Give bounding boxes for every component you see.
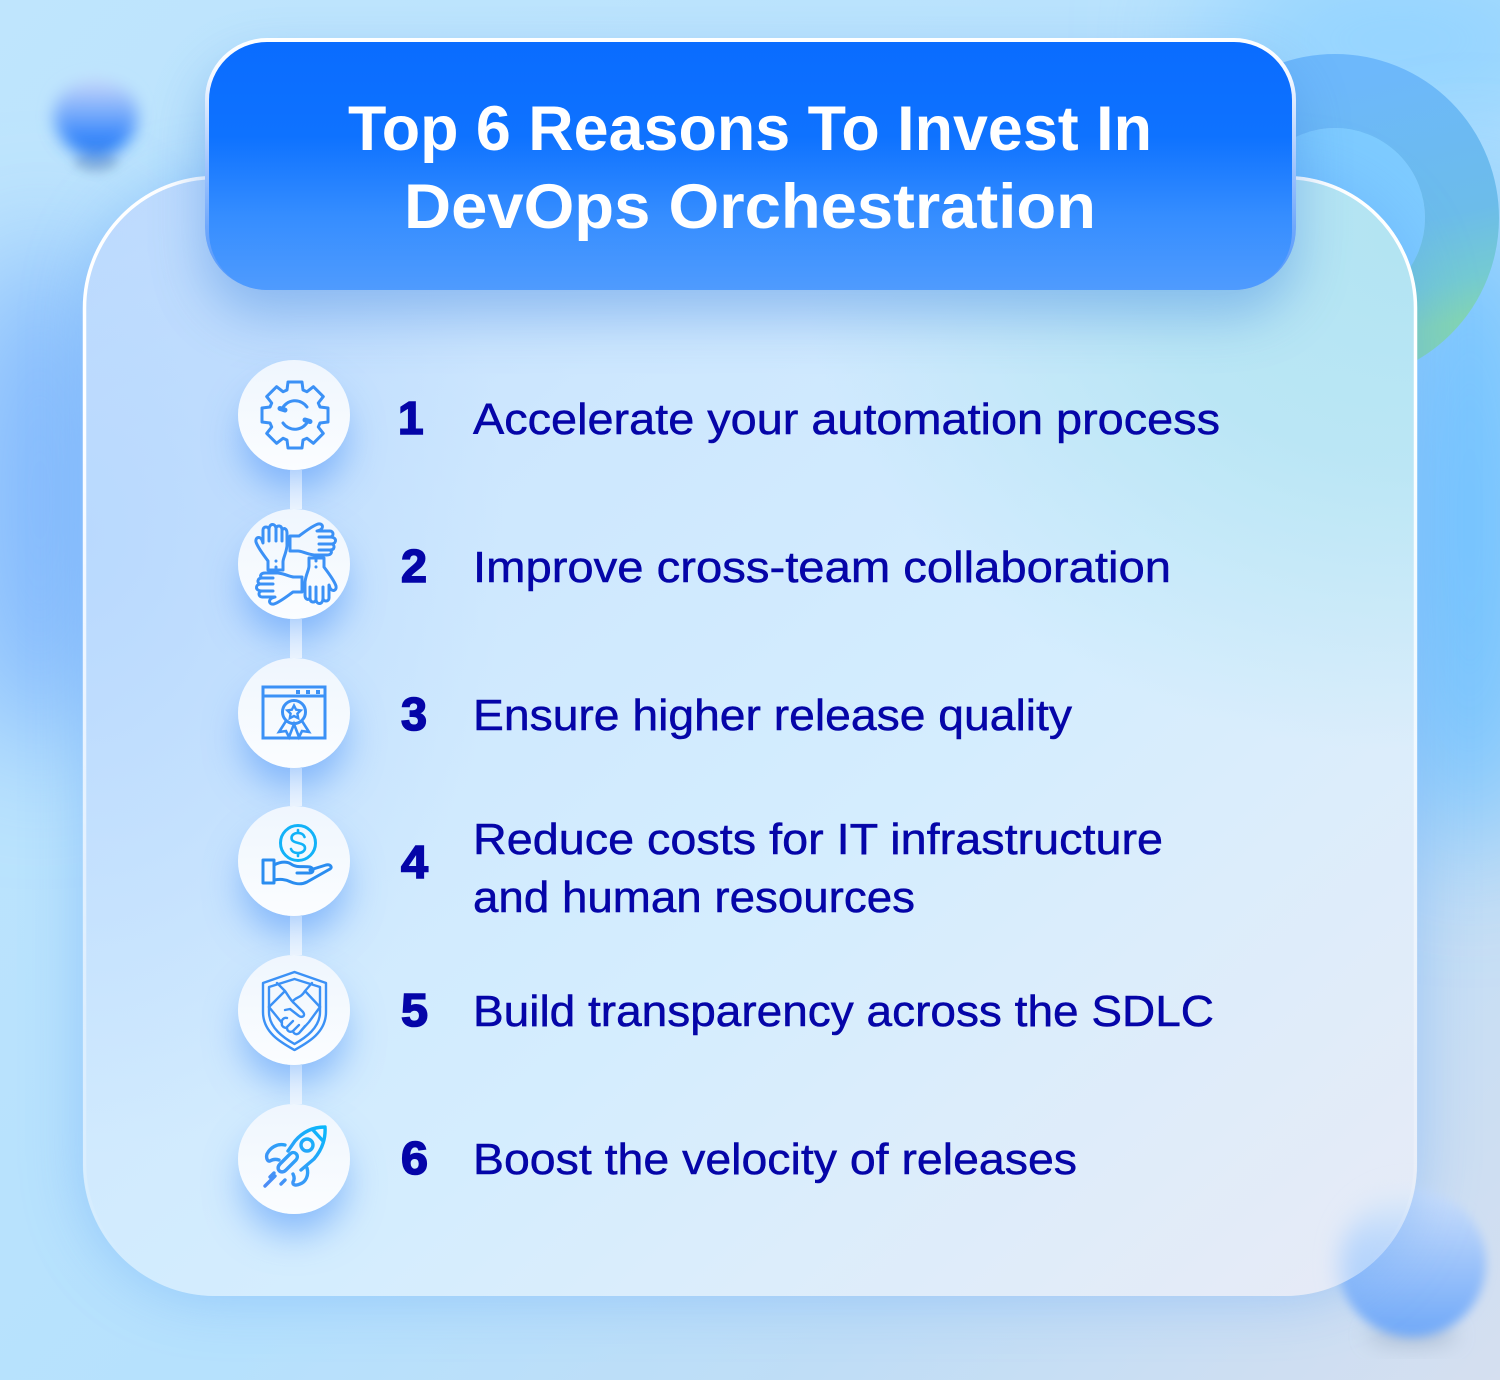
decorative blurred ball top left	[54, 80, 138, 172]
title banner	[205, 38, 1296, 290]
icon circle 4	[238, 806, 350, 916]
item 5: Build transparency across the SDLC	[473, 987, 1214, 1036]
item 4: 4	[401, 836, 428, 888]
title: DevOps Orchestration	[404, 172, 1096, 242]
connector link 3	[290, 768, 302, 806]
item 1: Accelerate your automation process	[473, 395, 1220, 444]
icon: shield handshake	[262, 970, 328, 1052]
item 2: 2	[401, 540, 427, 592]
icon circle 3	[238, 658, 350, 768]
decorative ring	[1208, 91, 1462, 345]
item 4: and human resources	[473, 873, 915, 922]
connector link 2	[290, 619, 302, 658]
title	[348, 94, 1152, 242]
title: Top 6 Reasons To Invest In	[348, 94, 1152, 164]
connector link 1	[290, 470, 302, 509]
icon circle 6	[238, 1104, 350, 1214]
item 4: Reduce costs for IT infrastructure	[473, 815, 1163, 864]
item 6: 6	[401, 1132, 428, 1184]
item 6: Boost the velocity of releases	[473, 1135, 1077, 1184]
main panel	[83, 176, 1417, 1296]
item 3: Ensure higher release quality	[473, 691, 1072, 740]
item 1: 1	[398, 392, 424, 444]
connector link 4	[290, 916, 302, 955]
panel rim and ball showing through glass	[82, 176, 1418, 1286]
connector link 5	[290, 1065, 302, 1104]
item 3: 3	[401, 688, 427, 740]
icon circle 1	[238, 360, 350, 470]
decorative blurred ball bottom right	[1338, 1189, 1486, 1347]
icon: browser with award ribbon	[262, 686, 326, 740]
icon: gear	[260, 380, 330, 450]
icon: rocket	[263, 1125, 327, 1188]
icon: four hands	[254, 522, 338, 606]
icon: hand holding dollar coin	[262, 824, 333, 886]
icon circle 5	[238, 955, 350, 1065]
icon circle 2	[238, 509, 350, 619]
item 5: 5	[401, 984, 428, 1036]
item 2: Improve cross-team collaboration	[473, 543, 1171, 592]
item 4	[401, 815, 1163, 922]
